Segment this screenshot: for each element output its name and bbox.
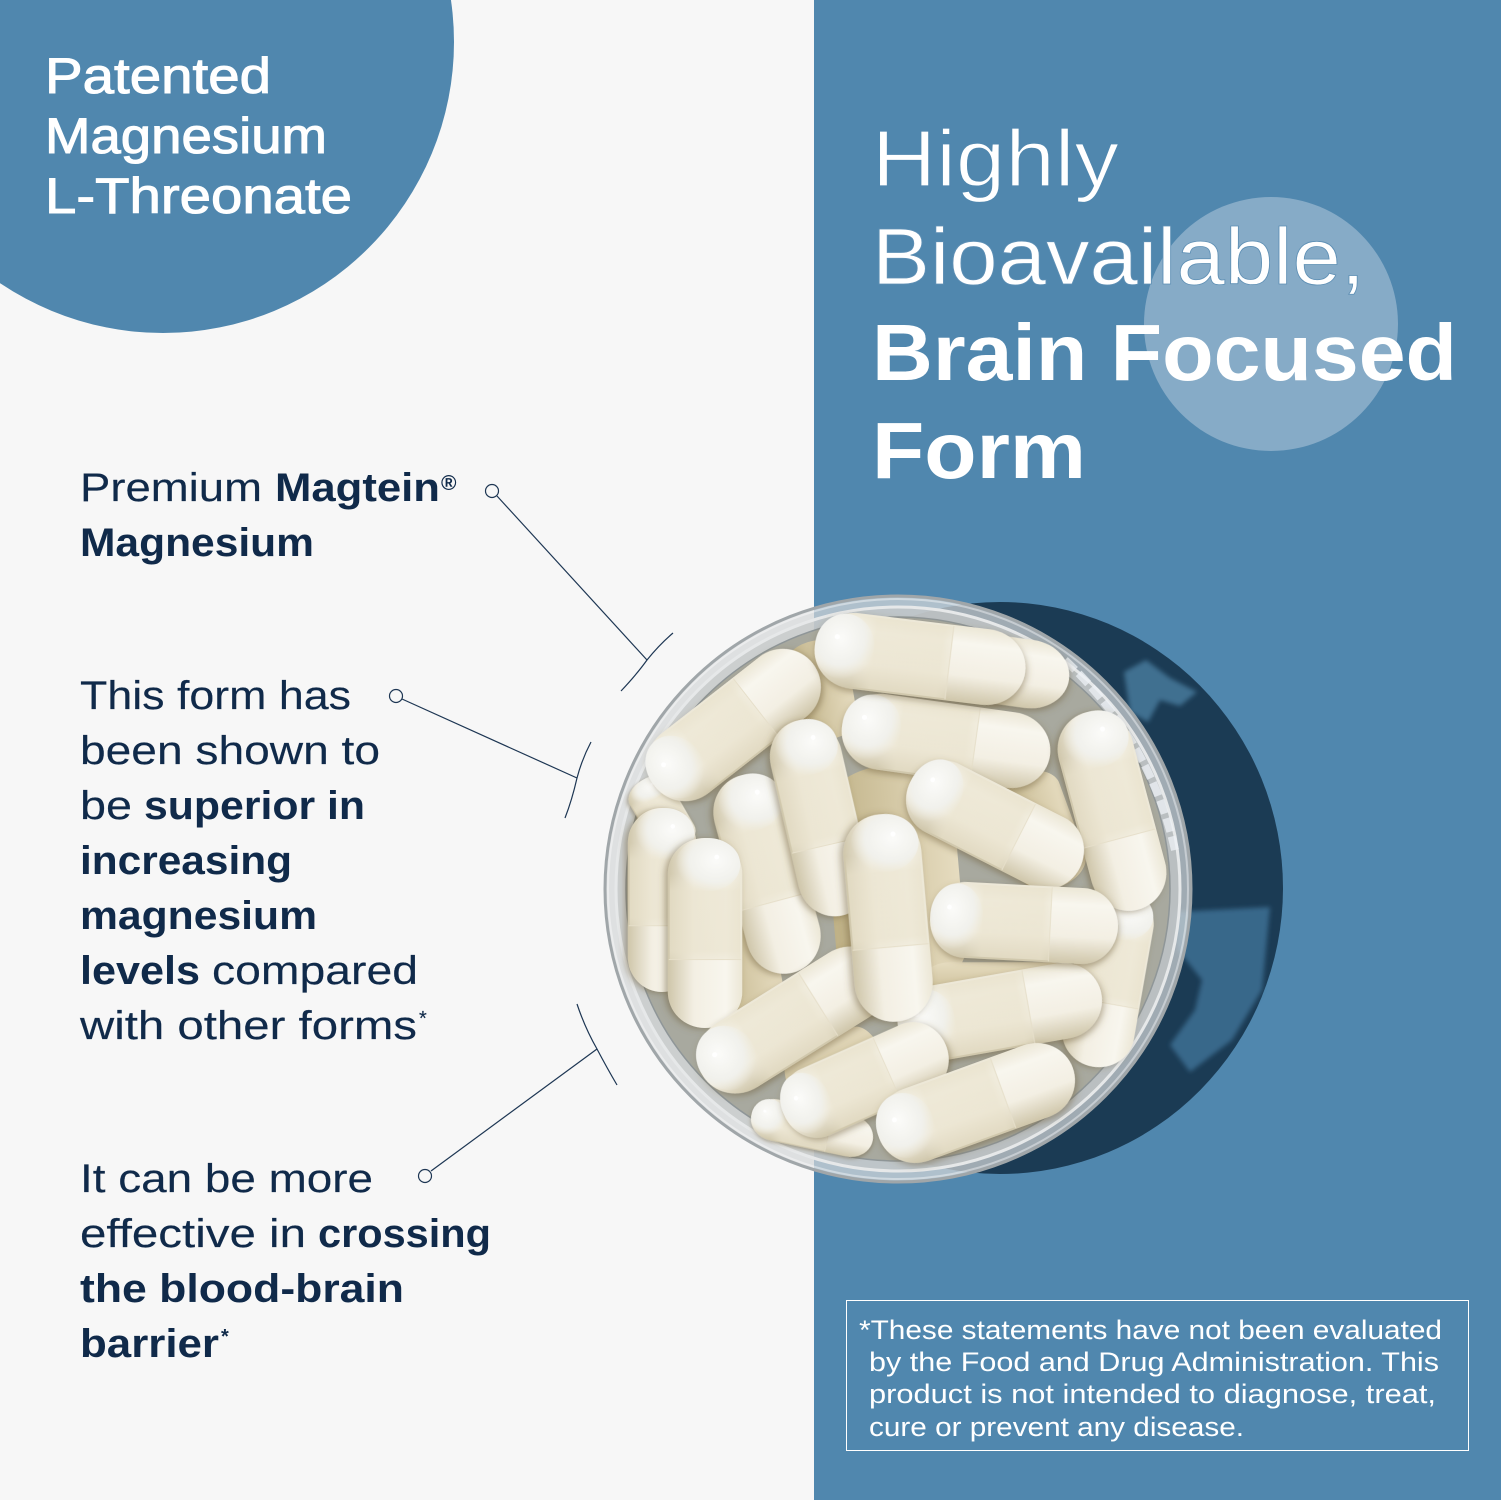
badge: patented magnesium: Patented [45, 48, 271, 104]
connector: middle callout [390, 690, 591, 818]
disclaimer box: *These statements have not been evaluated [859, 1315, 1442, 1345]
capsules in front [632, 633, 836, 817]
heading [872, 114, 1457, 495]
text block: superior in increasing: * [419, 1008, 427, 1030]
text block: superior in increasing: compared [212, 949, 418, 993]
disclaimer box [846, 1300, 1468, 1450]
text block: premium magtein: ® [441, 472, 457, 495]
dish shadow [717, 602, 1283, 1174]
text block: superior in increasing: magnesium [80, 894, 317, 938]
text block: premium magtein: Magtein [275, 466, 440, 510]
text block: superior in increasing: with other forms [79, 1004, 417, 1048]
text block: blood-brain barrier: It can be more [80, 1157, 373, 1201]
badge: patented magnesium: Magnesium [45, 108, 327, 164]
text block: blood-brain barrier: the blood-brain [80, 1267, 404, 1311]
text block: premium magtein [80, 466, 457, 565]
connector: bottom callout [418, 1004, 617, 1182]
glass dish with capsules [605, 596, 1191, 1182]
heading: Brain Focused [872, 308, 1457, 397]
text block: superior in increasing: increasing [80, 839, 292, 883]
disclaimer box: product is not intended to diagnose, treat, [869, 1379, 1436, 1409]
connector: top callout [486, 484, 673, 691]
text block: superior in increasing: This form has [80, 674, 351, 718]
text block: superior in increasing: superior in [144, 784, 365, 828]
text block: blood-brain barrier: * [221, 1326, 229, 1348]
capsules behind [821, 760, 969, 1000]
text block: blood-brain barrier: crossing [318, 1212, 491, 1256]
text block: premium magtein: Magnesium [80, 521, 314, 565]
text block: blood-brain barrier: effective in [80, 1212, 306, 1256]
text block: superior in increasing: been shown to [80, 729, 380, 773]
panel: blue right side [814, 0, 1501, 1500]
heading: Highly [872, 114, 1119, 203]
heading: Bioavailable, [872, 212, 1365, 301]
badge: patented magnesium [0, 0, 454, 333]
text block: superior in increasing: be [80, 784, 132, 828]
heading: Form [872, 406, 1086, 495]
decorative light circle [1144, 197, 1398, 451]
text block: premium magtein: Premium [80, 466, 262, 510]
disclaimer box: cure or prevent any disease. [869, 1412, 1244, 1442]
text block: blood-brain barrier [80, 1157, 491, 1366]
text block: superior in increasing [79, 674, 427, 1048]
disclaimer box: by the Food and Drug Administration. This [869, 1347, 1439, 1377]
text block: blood-brain barrier: barrier [80, 1322, 219, 1366]
text block: superior in increasing: levels [80, 949, 200, 993]
badge: patented magnesium: L-Threonate [45, 168, 352, 224]
